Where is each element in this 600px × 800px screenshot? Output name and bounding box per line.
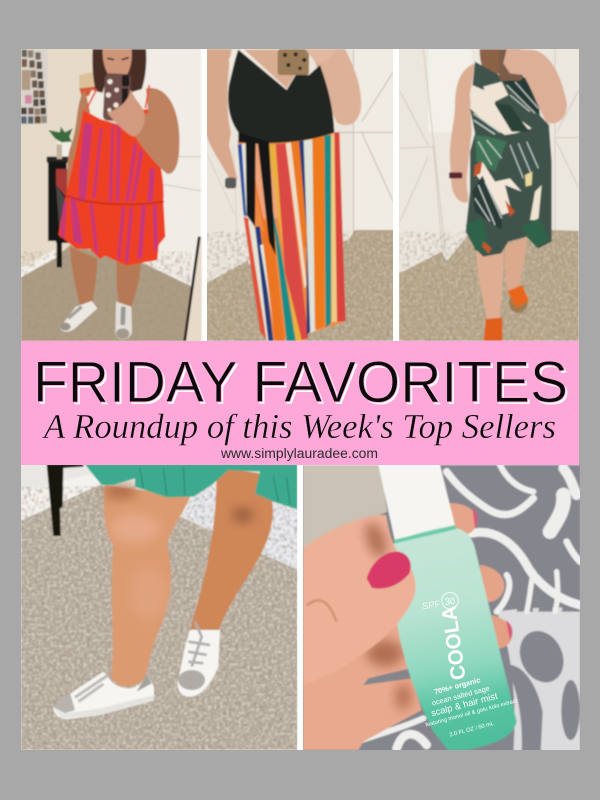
- baseboard: [21, 472, 100, 521]
- sneaker back right: [178, 622, 220, 697]
- photo: legs and glitter sneakers: [20, 460, 300, 753]
- photo: tropical leaf print dress and orange sandals: [395, 45, 585, 345]
- arm left: [450, 63, 475, 202]
- black table leg: [47, 464, 83, 536]
- bottle cap: [378, 465, 455, 541]
- leaf prints: [466, 75, 550, 255]
- legs: [70, 247, 97, 309]
- lace: [87, 88, 142, 121]
- side table: [47, 157, 70, 267]
- subtitle: A Roundup of this Week's Top Sellers: [42, 407, 556, 446]
- teal skirt ruffle: [85, 464, 297, 509]
- arm right: [133, 88, 179, 174]
- phone: [103, 73, 131, 122]
- wall hanging: [79, 72, 95, 89]
- dress: [466, 62, 552, 257]
- leopard phone case: [278, 49, 309, 75]
- carpet: [21, 245, 192, 341]
- carpet: [21, 485, 297, 750]
- black wrap top: [228, 50, 334, 143]
- arm right: [315, 49, 361, 125]
- finger top: [447, 503, 477, 535]
- nail: [367, 552, 411, 589]
- banner: title block: [21, 341, 579, 465]
- straps: [87, 85, 149, 109]
- bottle label: [422, 592, 518, 739]
- watch band: [449, 172, 462, 178]
- photo: hand holding COOLA scalp and hair mist: [300, 465, 580, 752]
- fingers: [304, 49, 318, 62]
- lace: [228, 56, 232, 66]
- bottle label: 30: [444, 596, 456, 607]
- bottle label: 2.0 FL OZ / 60 mL: [449, 721, 495, 739]
- leg right: [190, 467, 273, 637]
- hair: [92, 49, 148, 94]
- photo: black top and multicolour striped maxi skirt: [205, 45, 395, 345]
- multicolour skirt: [238, 132, 346, 341]
- plant: [48, 127, 73, 159]
- sneaker left: [60, 301, 97, 332]
- dress: [58, 109, 165, 266]
- bottle label: SPF: [422, 599, 441, 611]
- photo collage on wall: [21, 49, 47, 124]
- carpet: [399, 230, 579, 341]
- arm right: [503, 49, 567, 123]
- face: [103, 49, 132, 78]
- arm left: [206, 49, 238, 180]
- website url: www.simplylauradee.com: [220, 446, 378, 461]
- floral background: [300, 465, 580, 752]
- title shadow: FRIDAY FAVORITES: [35, 352, 570, 417]
- barn door panels: [206, 49, 395, 268]
- bottle label: ocean salted sage: [431, 684, 491, 708]
- hand left: [451, 179, 468, 203]
- leg left: [104, 485, 190, 687]
- mirror edge: [187, 237, 202, 341]
- white door: [183, 487, 297, 569]
- hair: [480, 49, 502, 80]
- carpet: [206, 230, 395, 341]
- baseboard: [21, 249, 55, 277]
- chest: [244, 50, 295, 88]
- hand palm and fingers: [303, 622, 422, 750]
- orange sandal front: [484, 318, 503, 341]
- thumb: [303, 515, 416, 685]
- bottle label: featuring monoi oil & gotu kola extract: [425, 698, 518, 729]
- arm left: [67, 90, 90, 193]
- bottle body: [392, 527, 517, 750]
- legs: [477, 252, 504, 322]
- sneaker right: [115, 302, 132, 339]
- title: FRIDAY FAVORITES: [33, 350, 568, 415]
- door: [140, 45, 206, 345]
- leopard phone: [499, 49, 522, 81]
- orange sandal back: [508, 285, 529, 313]
- sneaker front left: [53, 672, 154, 719]
- watch: [225, 178, 236, 188]
- dress stripes: [60, 123, 158, 263]
- belt tie: [238, 132, 276, 255]
- finger middle: [480, 565, 504, 602]
- photo: red striped dress outfit: [20, 45, 207, 345]
- barn door panels: [400, 49, 579, 262]
- bottle label: 70%+ organic: [433, 675, 481, 696]
- bottle label: scalp & hair mist: [430, 691, 499, 718]
- hand: [107, 90, 145, 137]
- finger ring: [492, 615, 512, 648]
- bottle label: COOLA: [437, 604, 471, 682]
